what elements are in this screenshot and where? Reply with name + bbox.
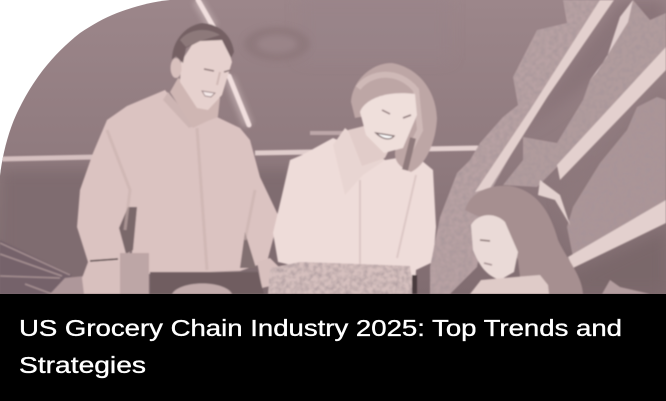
produce on shelf 3 xyxy=(567,97,666,257)
ribbon xyxy=(538,180,570,225)
dress xyxy=(470,275,549,294)
shelf 1 strip xyxy=(475,0,614,192)
title text xyxy=(19,315,622,378)
title banner xyxy=(0,294,666,401)
hair xyxy=(172,23,234,63)
groceries in cart xyxy=(268,262,417,294)
title text: Strategies xyxy=(19,352,146,378)
woman xyxy=(273,63,437,294)
man xyxy=(77,23,280,294)
collar xyxy=(163,92,218,128)
shelf 2 strip xyxy=(557,47,666,180)
produce on shelf 2 xyxy=(503,0,666,187)
hands xyxy=(82,262,124,294)
store background xyxy=(0,0,666,294)
shirt xyxy=(77,90,279,274)
girl xyxy=(465,186,583,294)
ceiling lights xyxy=(2,0,478,159)
shirt xyxy=(273,138,436,294)
neck xyxy=(348,126,388,164)
left shelf xyxy=(0,240,84,294)
title text: US Grocery Chain Industry 2025: Top Trends and xyxy=(19,315,622,341)
face xyxy=(360,93,417,153)
face xyxy=(471,215,518,280)
shelf 3 strip xyxy=(568,200,666,268)
hair xyxy=(351,63,437,172)
lower produce xyxy=(602,280,650,294)
photo: family shopping in grocery aisle with mauve duotone xyxy=(0,0,666,294)
produce on shelf 1 xyxy=(430,0,600,294)
cart xyxy=(120,253,264,294)
neck and face xyxy=(170,78,220,128)
hair xyxy=(465,186,583,294)
produce shelves xyxy=(430,0,666,294)
